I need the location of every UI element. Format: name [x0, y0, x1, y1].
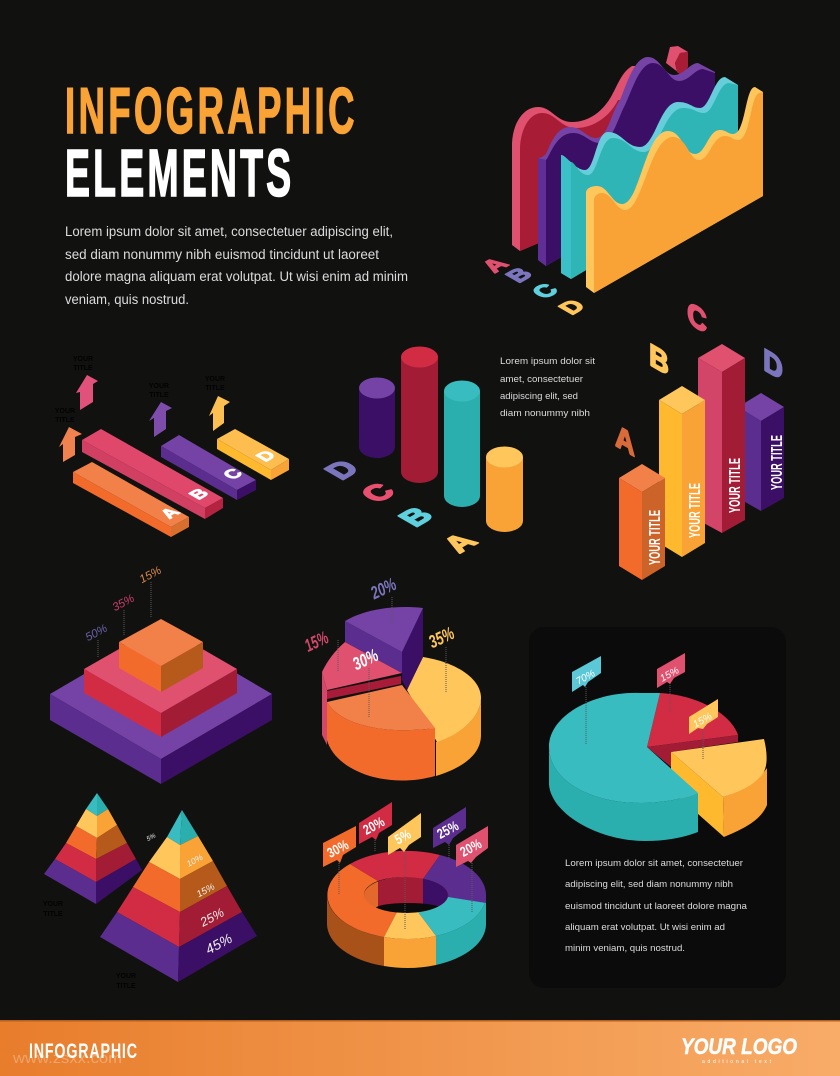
- wave A: [512, 66, 640, 251]
- large pyramid: TITLE: [116, 983, 136, 990]
- column letters: A: [615, 417, 635, 464]
- arrow titles: TITLE: [73, 365, 93, 372]
- stepped pyramid labels: 35%: [111, 593, 137, 614]
- watermark: www.zsxx.com: [12, 1050, 122, 1067]
- middle text block: [500, 356, 595, 419]
- column B yellow: [659, 386, 705, 557]
- flag 15% pink: [657, 653, 685, 688]
- pie slice red: [647, 693, 738, 767]
- flag 5%: [388, 813, 421, 855]
- large pyramid labels: [146, 832, 235, 957]
- flag 15% pink: 15%: [658, 665, 681, 684]
- wave letters: C: [526, 280, 565, 302]
- pie slice purple: [345, 607, 423, 690]
- panel text block: adipiscing elit, sed diam nonummy nibh: [565, 879, 733, 890]
- cylinder letters: [317, 455, 485, 557]
- cylinder orange: [486, 446, 523, 532]
- isometric arrow bars: [55, 356, 289, 537]
- middle text block: diam nonummy nibh: [500, 408, 590, 419]
- arrow titles: YOUR: [55, 408, 75, 415]
- arrow titles: YOUR: [149, 383, 169, 390]
- small pyramid: [43, 793, 142, 918]
- column A orange: [619, 464, 665, 580]
- arrow titles: TITLE: [205, 385, 225, 392]
- pie labels: 35%: [425, 623, 457, 652]
- cylinder letters: D: [317, 455, 367, 484]
- large pyramid labels: 25%: [197, 905, 226, 930]
- column C pink: YOUR TITLE: [727, 458, 744, 513]
- column letters: [615, 294, 783, 464]
- stepped pyramid: [50, 565, 272, 784]
- wave letters: A: [476, 254, 515, 276]
- bar C: C: [218, 466, 247, 482]
- pie labels: [301, 574, 457, 717]
- large pyramid: YOUR: [116, 973, 136, 980]
- title: INFOGRAPHIC: [65, 75, 358, 148]
- donut sides: [327, 895, 486, 968]
- small pyramid: TITLE: [43, 911, 63, 918]
- donut hole: [364, 877, 448, 913]
- panel: dark card with pie: [529, 627, 786, 988]
- flag 70%: 70%: [574, 668, 597, 687]
- arrow yellow: [209, 396, 230, 431]
- cylinder red: [401, 346, 438, 483]
- donut leader lines: [339, 840, 472, 930]
- footer band: [0, 1020, 840, 1076]
- pie labels: 20%: [367, 574, 399, 603]
- panel text block: aliquam erat volutpat. Ut wisi enim ad: [565, 922, 725, 933]
- intro text block: veniam, quis nostrud.: [65, 292, 189, 307]
- intro text block: [65, 224, 408, 307]
- flag 25%: [433, 807, 466, 848]
- small pyramid: YOUR: [43, 901, 63, 908]
- large pyramid: [100, 810, 257, 990]
- large pyramid labels: 5%: [146, 832, 157, 843]
- middle text block: Lorem ipsum dolor sit: [500, 356, 595, 367]
- wave A tip: [666, 46, 688, 76]
- pie labels: 30%: [349, 645, 381, 674]
- exploded pie chart: [301, 574, 481, 781]
- column D purple: YOUR TITLE: [769, 435, 786, 490]
- panel text block: minim veniam, quis nostrud.: [565, 943, 685, 954]
- arrow titles: TITLE: [149, 392, 169, 399]
- arrow orange: [59, 427, 82, 462]
- footer logo: additional text: [702, 1059, 772, 1065]
- flag 20% red: 20%: [360, 813, 387, 838]
- column B yellow: YOUR TITLE: [687, 483, 704, 538]
- arrow titles: [55, 356, 225, 424]
- wave D: [586, 87, 763, 293]
- bar A: A: [155, 505, 184, 521]
- cylinder purple: [359, 378, 395, 458]
- arrow titles: YOUR: [73, 356, 93, 363]
- pie slice yellow extracted: [671, 739, 767, 837]
- stepped pyramid labels: 50%: [84, 623, 110, 644]
- pie slice pink: [322, 642, 402, 745]
- pie labels: 15%: [301, 627, 332, 656]
- middle layer 35%: [84, 625, 237, 737]
- intro text block: Lorem ipsum dolor sit amet, consectetuer adipiscing elit,: [65, 224, 393, 239]
- arrow purple: [149, 402, 172, 437]
- bar B: B: [184, 486, 213, 502]
- pie slice teal: [549, 693, 698, 841]
- flag 30%: 30%: [324, 836, 351, 861]
- base layer 50%: [50, 629, 272, 784]
- wave C: [561, 77, 738, 279]
- bar D: [217, 429, 289, 480]
- bar C: [161, 435, 256, 500]
- column A orange: YOUR TITLE: [647, 510, 664, 565]
- top layer 15%: [119, 619, 203, 692]
- donut chart: [323, 802, 488, 968]
- cylinder chart: [317, 346, 523, 557]
- flag 20% red: [359, 802, 392, 844]
- column letters: C: [687, 294, 707, 341]
- panel text block: euismod tincidunt ut laoreet dolore magna: [565, 901, 748, 912]
- pie slice orange: [327, 685, 435, 781]
- flag 20% pink: 20%: [457, 835, 484, 860]
- flag 15% yellow: 15%: [691, 711, 714, 730]
- panel text block: Lorem ipsum dolor sit amet, consectetuer: [565, 858, 743, 869]
- title: [65, 75, 358, 211]
- wave B: [538, 57, 715, 266]
- arrow pink: [76, 375, 98, 410]
- wave letters: [476, 254, 592, 318]
- bar D: D: [251, 448, 280, 464]
- 3D column chart: [615, 294, 786, 580]
- footer logo: YOUR LOGO: [681, 1034, 797, 1059]
- column letters: B: [649, 336, 669, 383]
- cylinder letters: B: [391, 502, 441, 531]
- donut top segments: [327, 851, 486, 939]
- cylinder teal: [444, 380, 480, 507]
- cylinder letters: A: [435, 528, 485, 557]
- large pyramid labels: 45%: [203, 930, 235, 957]
- column C pink: [698, 344, 745, 533]
- bar A: [73, 462, 189, 537]
- intro text block: dolore magna aliquam erat volutpat. Ut wisi enim ad minim: [65, 269, 408, 284]
- cylinder letters: C: [353, 478, 403, 507]
- flag 15% yellow: [689, 699, 718, 734]
- area wave chart: [476, 46, 763, 318]
- pie slice yellow: [407, 657, 481, 776]
- arrow titles: YOUR: [205, 376, 225, 383]
- bar B: [82, 429, 223, 519]
- middle text block: amet, consectetuer: [500, 374, 583, 385]
- stepped pyramid labels: 15%: [138, 565, 164, 586]
- column D purple: [738, 393, 786, 511]
- flag 20% pink: [456, 826, 488, 867]
- flag 70%: [572, 656, 601, 692]
- flag 30%: [323, 826, 356, 867]
- wave letters: D: [553, 296, 592, 318]
- wave letters: B: [500, 264, 539, 286]
- title: ELEMENTS: [65, 136, 294, 211]
- large pyramid labels: 10%: [185, 852, 205, 869]
- leader lines: [586, 683, 703, 760]
- column letters: D: [763, 341, 783, 388]
- flag 5%: 5%: [392, 826, 414, 847]
- intro text block: sed diam nonummy nibh euismod tincidunt ut laoreet: [65, 247, 379, 262]
- flag 25%: 25%: [434, 817, 461, 842]
- footer title: INFOGRAPHIC: [29, 1039, 138, 1063]
- large pyramid labels: 15%: [195, 881, 217, 900]
- stepped pyramid labels: [84, 565, 164, 658]
- middle text block: adipiscing elit, sed: [500, 391, 578, 402]
- panel text block: [565, 858, 748, 954]
- arrow titles: TITLE: [55, 417, 75, 424]
